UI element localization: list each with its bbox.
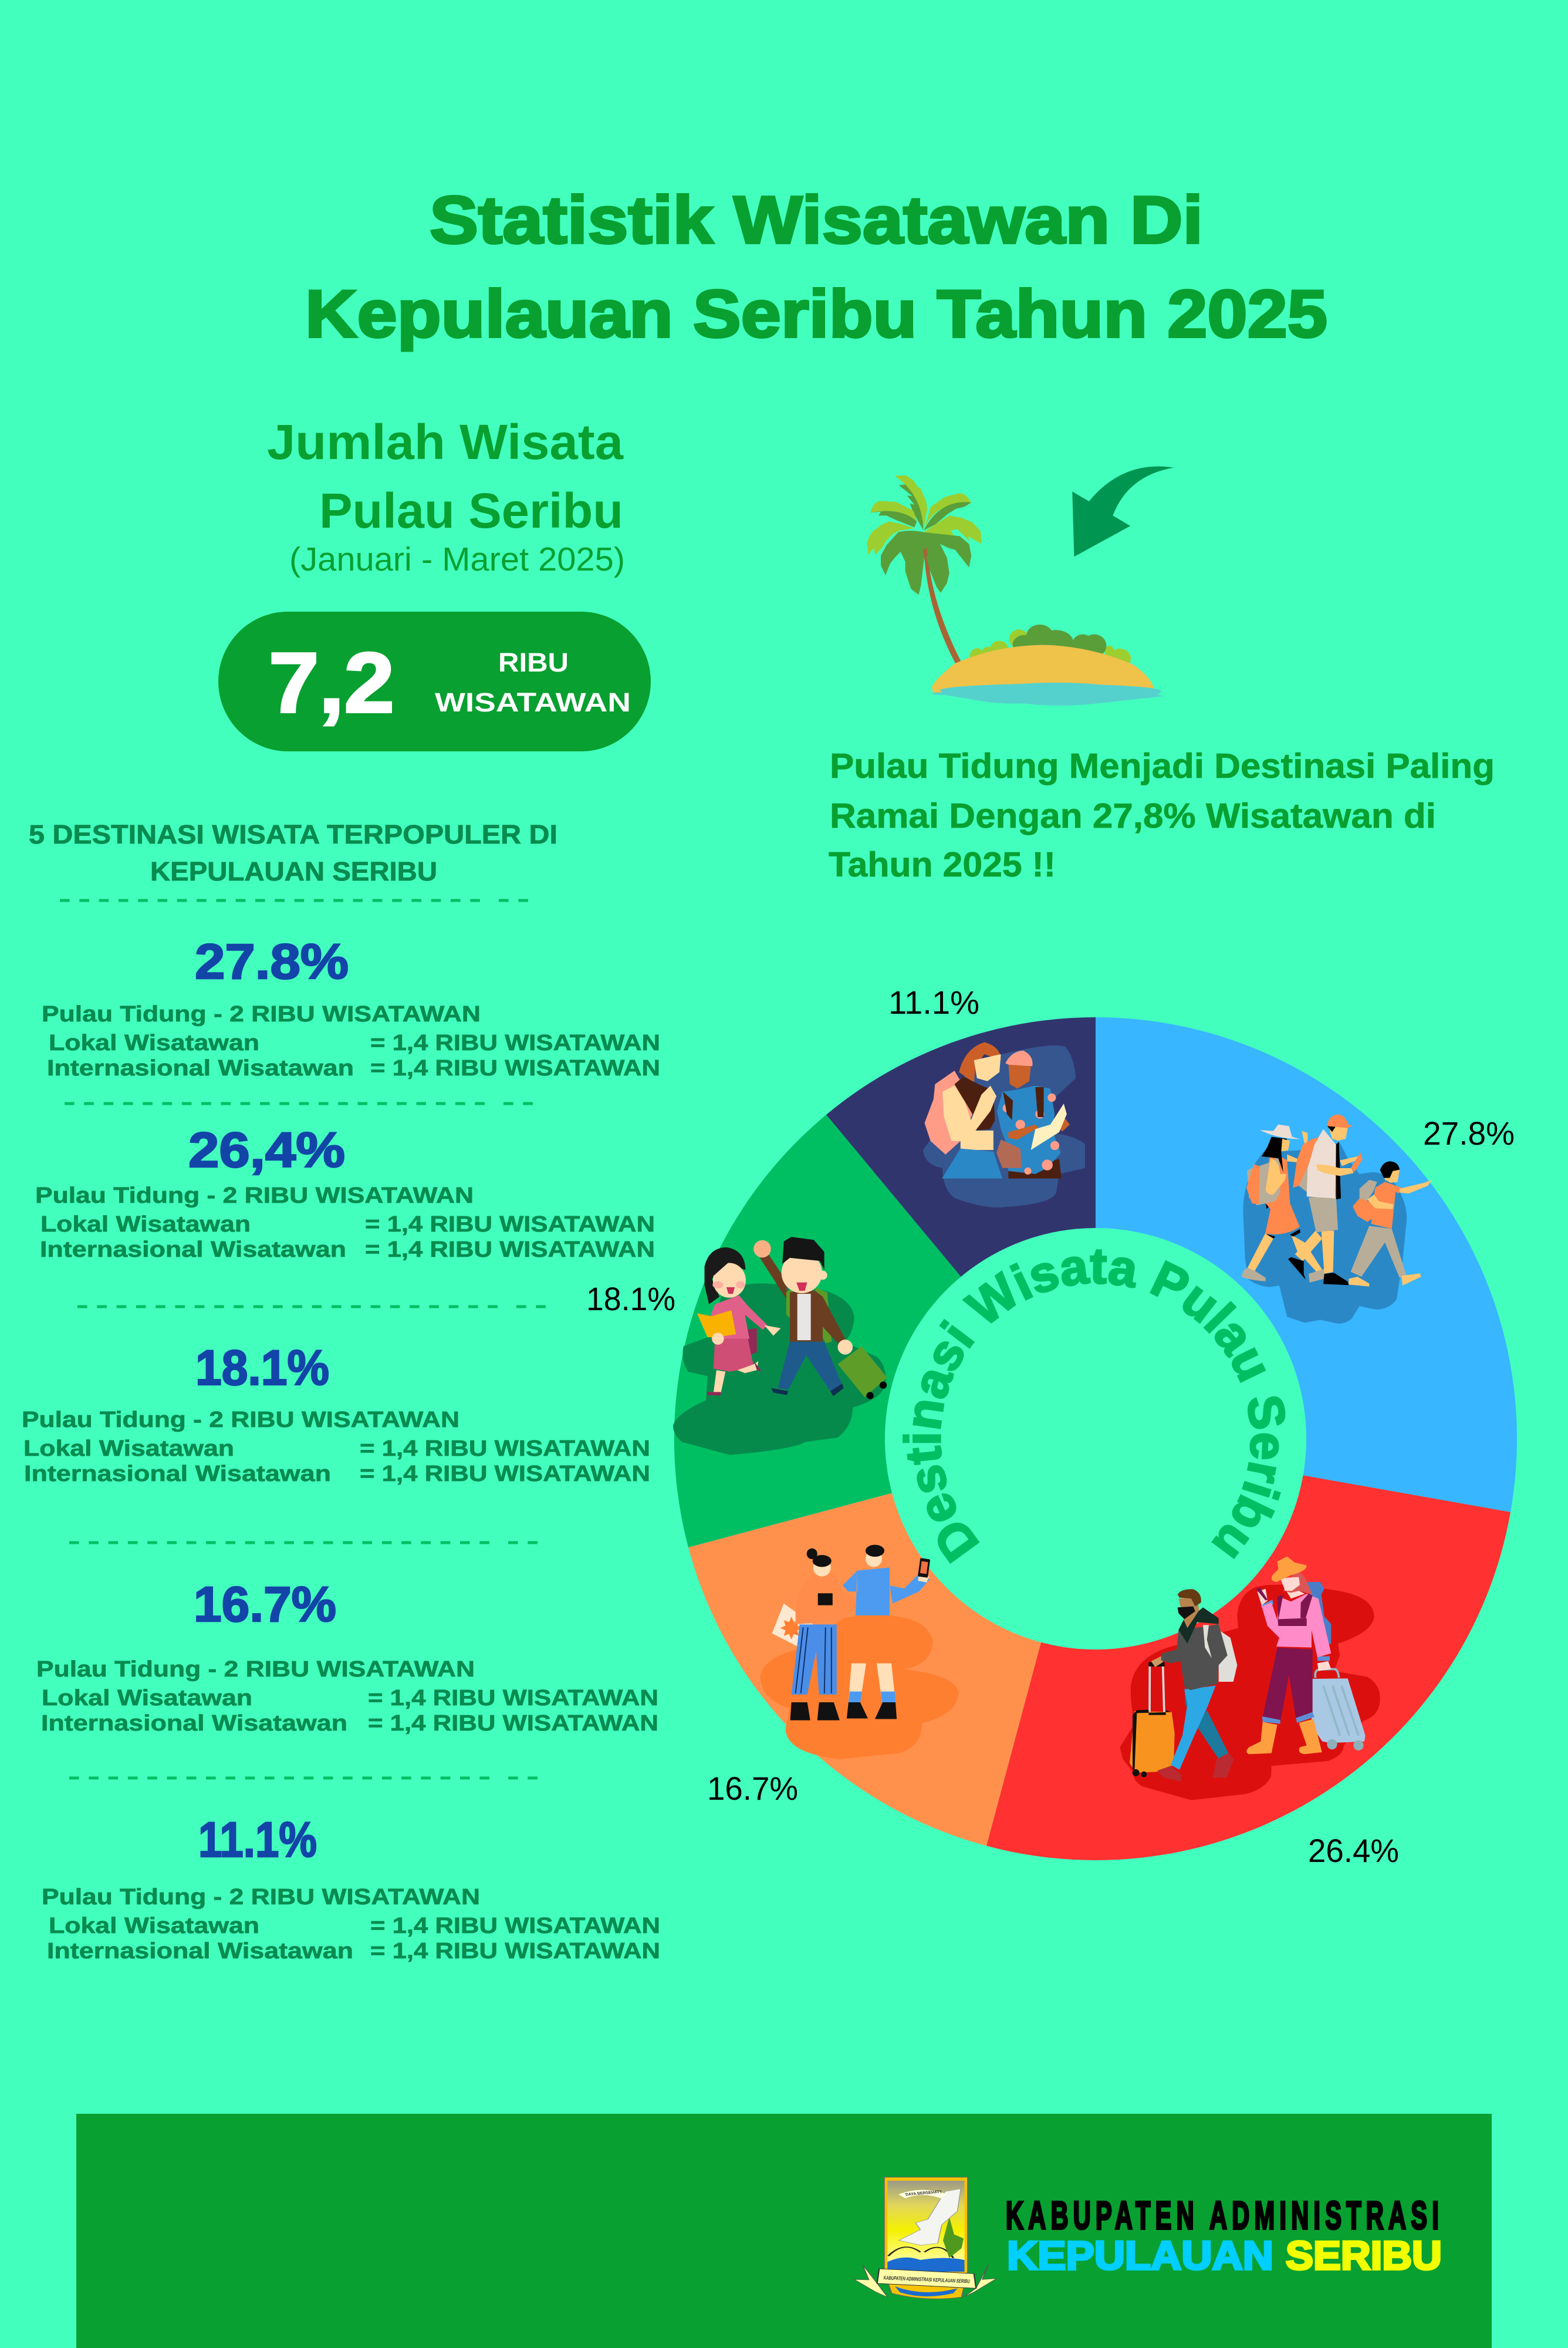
destination 3: [22, 1340, 650, 1486]
chart label: 11.1%: 11.1%: [888, 984, 979, 1021]
destination 5: [42, 1812, 660, 1964]
heading: 5 destinasi: 5 DESTINASI WISATA TERPOPULER DI: [29, 819, 557, 849]
destination 3: Internasional Wisatawan: [24, 1462, 331, 1486]
slice: navy 11.1%: [826, 1017, 1096, 1277]
illustration: happy couple: [673, 1237, 887, 1455]
slice: blue 27.8%: [1096, 1017, 1517, 1512]
destination 5: 11.1%: [198, 1812, 317, 1867]
destination 1: 27.8%: [195, 934, 349, 989]
illustration: couple with phone: [760, 1545, 958, 1759]
destination 5: Lokal Wisatawan: [49, 1914, 259, 1938]
chart label: 27.8%: 27.8%: [1423, 1115, 1515, 1152]
destination 2: 26,4%: [188, 1122, 345, 1178]
destination 2: Pulau Tidung - 2 RIBU WISATAWAN: [35, 1183, 474, 1208]
destination 4: Pulau Tidung - 2 RIBU WISATAWAN: [36, 1657, 475, 1682]
donut chart: [674, 1017, 1517, 1860]
footer title: kepulauan: KEPULAUAN: [1007, 2233, 1273, 2278]
destination 4: Internasional Wisatawan: [41, 1711, 347, 1736]
arrow: [1072, 467, 1174, 556]
destination 4: Lokal Wisatawan: [42, 1686, 252, 1711]
slice: green 18.1%: [674, 1115, 961, 1547]
title: Kepulauan Seribu Tahun 2025: [305, 277, 1327, 352]
total visitors pill: WISATAWAN: [435, 687, 631, 717]
destination 1: Pulau Tidung - 2 RIBU WISATAWAN: [42, 1002, 481, 1027]
chart label: 18.1%: 18.1%: [586, 1280, 675, 1317]
heading: jumlah wisata: Pulau Seribu: [319, 483, 623, 538]
destination 2: = 1,4 RIBU WISATAWAN: [365, 1237, 655, 1262]
destination 3: Lokal Wisatawan: [23, 1436, 234, 1461]
icon: regency emblem: [854, 2177, 996, 2299]
destination 2: [35, 1122, 655, 1262]
destination 4: 16.7%: [194, 1577, 336, 1632]
destination 3: = 1,4 RIBU WISATAWAN: [360, 1462, 650, 1486]
destination 3: Pulau Tidung - 2 RIBU WISATAWAN: [22, 1408, 459, 1432]
destination 1: Lokal Wisatawan: [49, 1031, 259, 1055]
heading: jumlah wisata: (Januari - Maret 2025): [289, 541, 625, 578]
destination 1: Internasional Wisatawan: [47, 1056, 354, 1081]
destination 5: Internasional Wisatawan: [47, 1939, 353, 1964]
destination 4: = 1,4 RIBU WISATAWAN: [368, 1686, 658, 1711]
total visitors pill: [218, 612, 651, 751]
illustration: travelers with suitcases: [1120, 1557, 1380, 1800]
destination 1: = 1,4 RIBU WISATAWAN: [370, 1031, 660, 1055]
heading: 5 destinasi: KEPULAUAN SERIBU: [150, 856, 437, 886]
callout: pulau tidung: Ramai Dengan 27,8% Wisatawan di: [830, 797, 1436, 835]
callout: pulau tidung: [829, 747, 1495, 884]
icon: palm island: [867, 475, 1164, 706]
destination 2: Lokal Wisatawan: [40, 1212, 251, 1237]
callout: pulau tidung: Pulau Tidung Menjadi Destinasi Paling: [830, 747, 1495, 785]
slice: red 26.4%: [986, 1475, 1510, 1860]
callout: pulau tidung: Tahun 2025 !!: [829, 845, 1056, 884]
illustration: family hikers: [1241, 1114, 1432, 1324]
destination 5: = 1,4 RIBU WISATAWAN: [370, 1914, 660, 1938]
footer band: [76, 2114, 1492, 2348]
destination 3: 18.1%: [195, 1340, 329, 1395]
title: Statistik Wisatawan Di: [430, 183, 1203, 258]
heading: jumlah wisata: Jumlah Wisata: [267, 414, 624, 470]
destination 2: Internasional Wisatawan: [40, 1237, 346, 1262]
heading: 5 destinasi: [29, 819, 557, 886]
footer band: KABUPATEN ADMINISTRASI KEPULAUAN SERIBU: [883, 2275, 970, 2285]
heading: jumlah wisata: [267, 414, 625, 578]
destination 2: = 1,4 RIBU WISATAWAN: [365, 1212, 655, 1237]
emblem motto: DAYA BERSEHATY: [905, 2190, 943, 2197]
destination 3: = 1,4 RIBU WISATAWAN: [360, 1436, 650, 1461]
chart label: 26.4%: 26.4%: [1308, 1832, 1399, 1869]
destination 5: = 1,4 RIBU WISATAWAN: [370, 1939, 660, 1964]
title: [305, 183, 1327, 352]
total visitors pill: RIBU: [498, 647, 569, 677]
destination 4: = 1,4 RIBU WISATAWAN: [368, 1711, 658, 1736]
destination 5: Pulau Tidung - 2 RIBU WISATAWAN: [42, 1885, 480, 1910]
chart label: 16.7%: 16.7%: [707, 1770, 798, 1807]
total visitors pill: 7,2: [269, 635, 394, 730]
footer title: seribu: SERIBU: [1286, 2233, 1442, 2278]
destination 1: [42, 934, 660, 1081]
destination 1: = 1,4 RIBU WISATAWAN: [370, 1056, 660, 1081]
destination 4: [36, 1577, 658, 1736]
slice: orange 16.7%: [688, 1493, 1041, 1846]
footer title: kabupaten administrasi: KABUPATEN ADMINISTRASI: [1006, 2194, 1439, 2237]
illustration: map readers: [923, 1043, 1085, 1207]
circular heading: Destinasi Wisata Pulau Seribu: [903, 1249, 1285, 1564]
